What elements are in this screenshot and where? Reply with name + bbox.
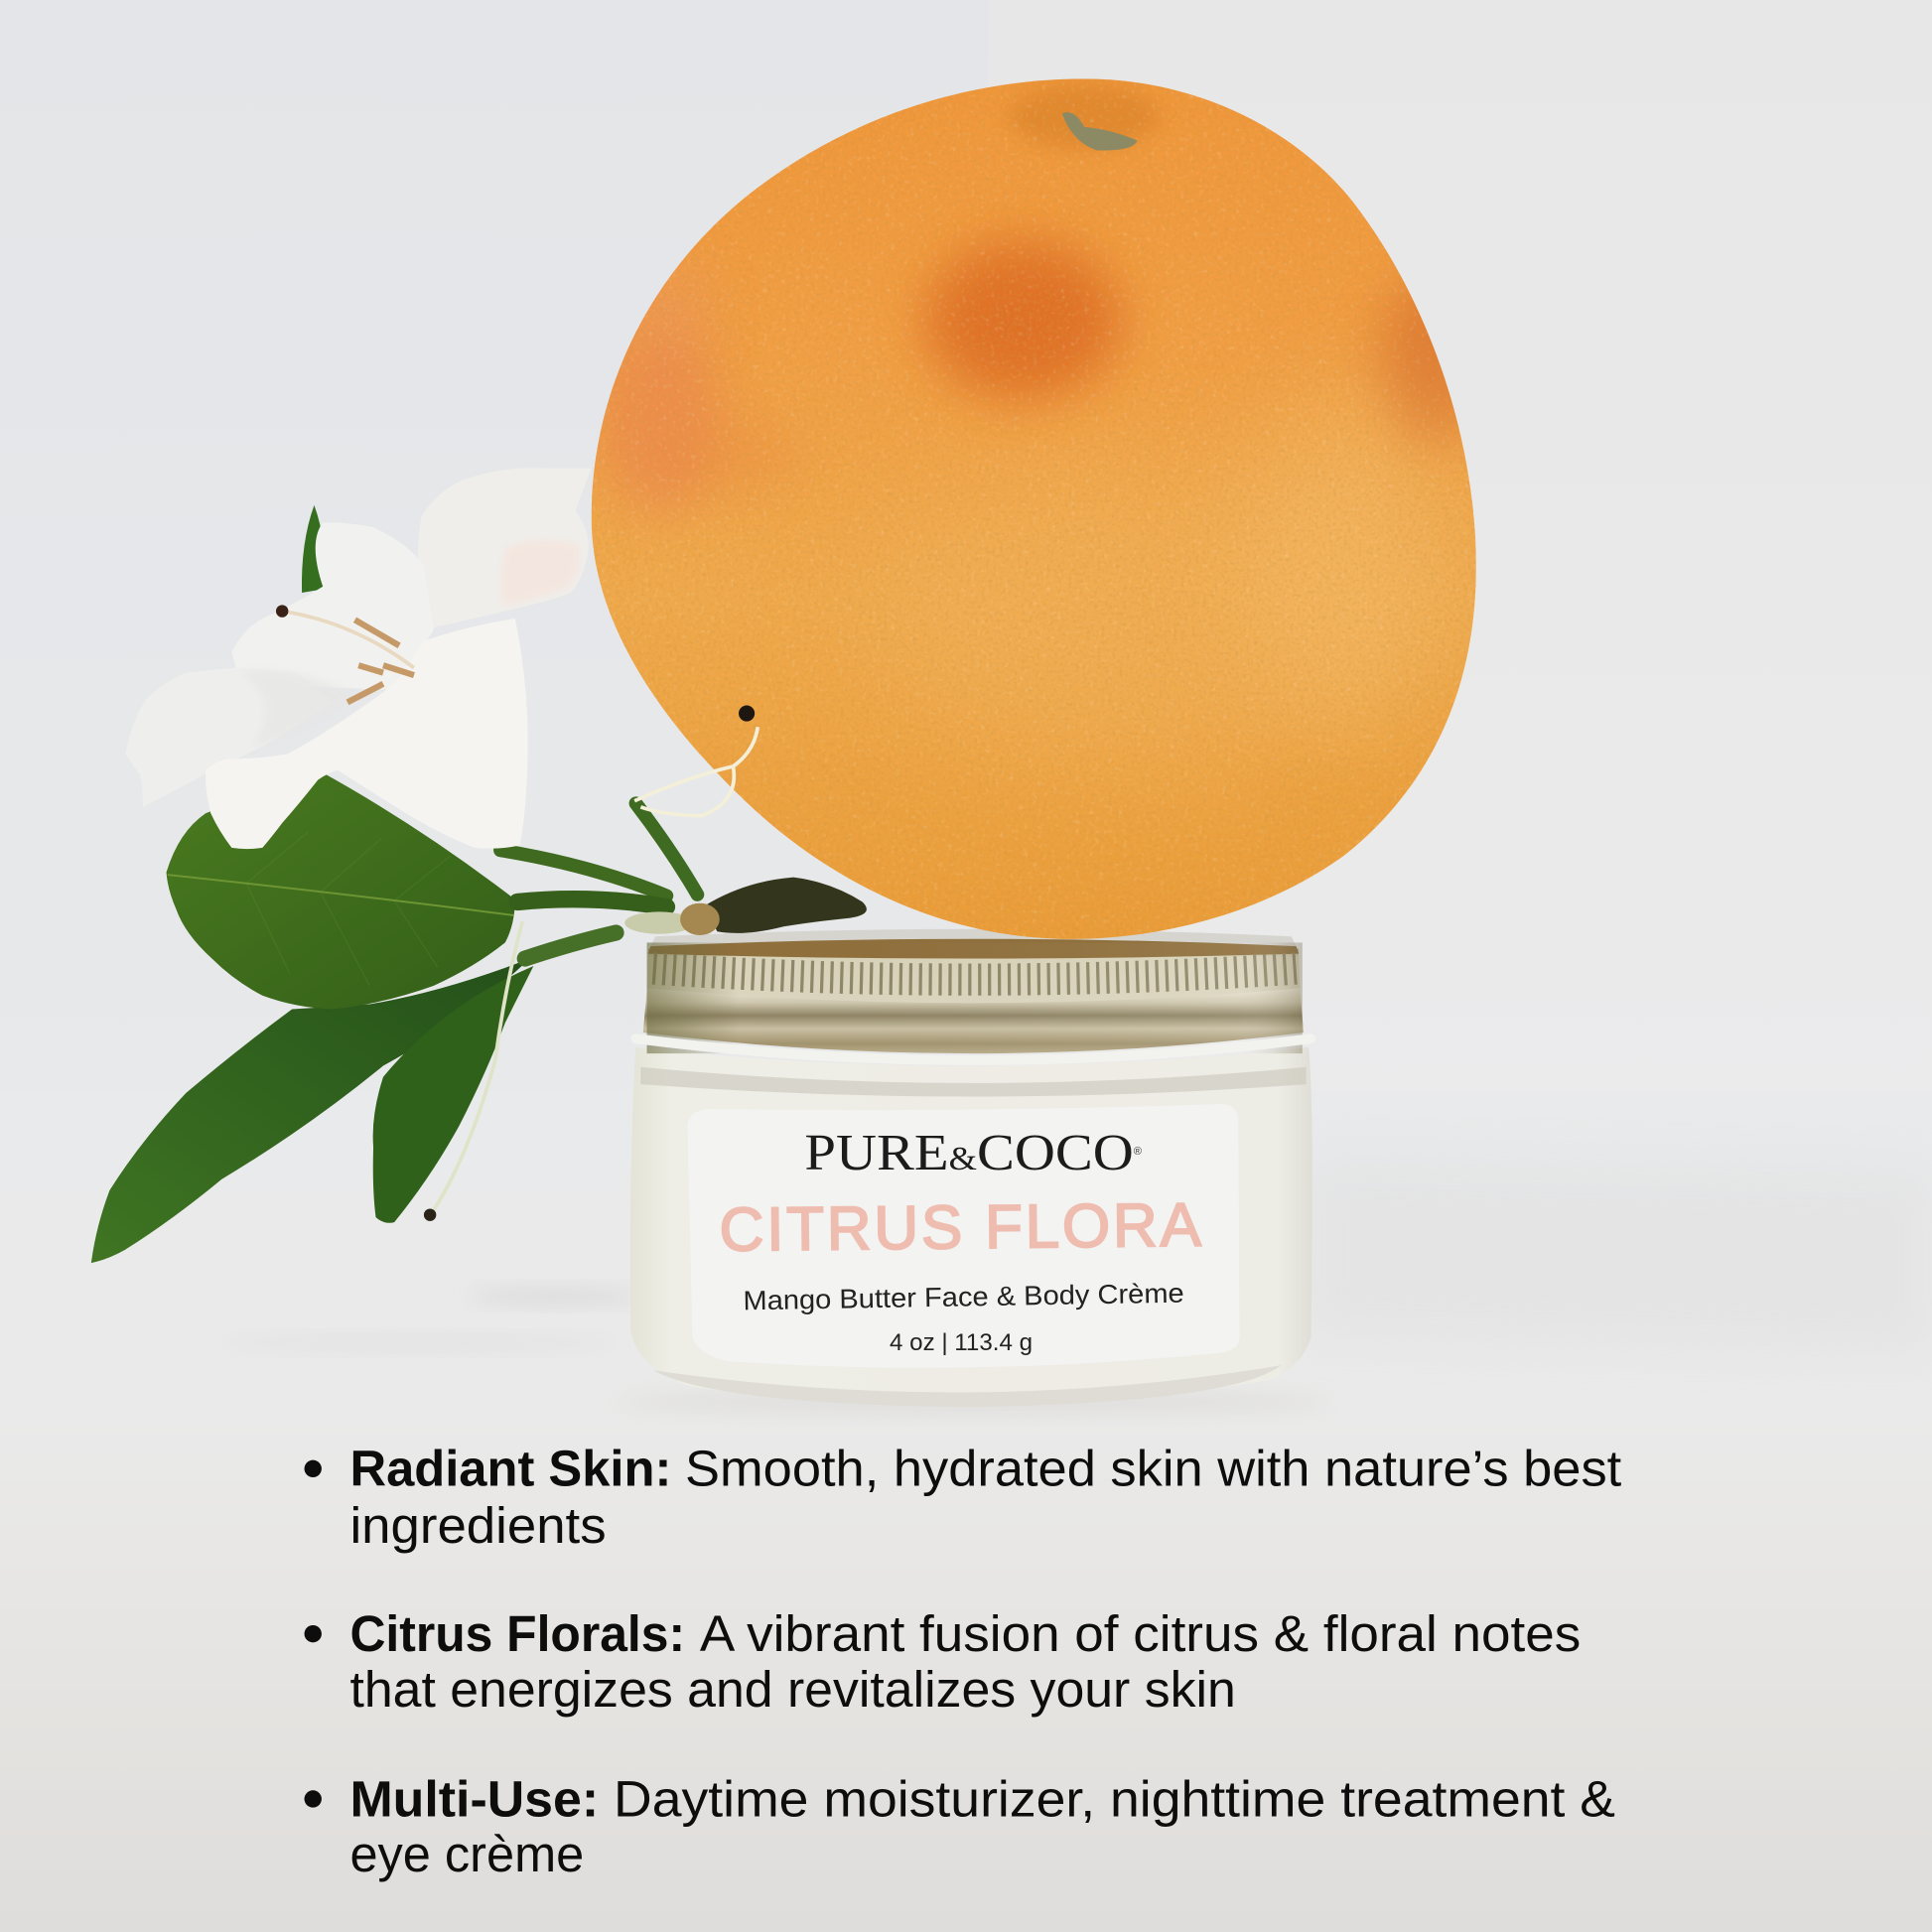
lower petal	[206, 619, 528, 849]
benefit: radiant skin	[305, 1441, 1621, 1554]
left petal	[126, 668, 333, 807]
brand name: PURE &COCO	[804, 1125, 1134, 1181]
benefit: multi-use	[305, 1770, 1615, 1882]
pink petal shade	[500, 539, 580, 607]
benefit: multi-use: Multi-Use:	[349, 1770, 599, 1827]
jar lid	[643, 929, 1304, 1053]
benefit: citrus florals: Citrus Florals:	[349, 1605, 685, 1662]
benefit: citrus florals: that energizes and revitalizes your skin	[349, 1661, 1236, 1718]
icon: white flower	[126, 468, 592, 849]
product title: CITRUS FLORA	[719, 1191, 1202, 1265]
benefit: radiant skin: Smooth, hydrated skin with nature’s best	[685, 1441, 1621, 1497]
benefit: multi-use: Daytime moisturizer, nighttime treatment &	[614, 1770, 1615, 1827]
weight: 4 oz | 113.4 g	[890, 1329, 1033, 1356]
upper center petal	[231, 522, 434, 690]
lower left leaf	[91, 959, 530, 1263]
benefit: radiant skin: ingredients	[349, 1497, 607, 1554]
dark stem	[705, 878, 867, 933]
icon: leaves and stems	[91, 505, 867, 1263]
petal shading	[240, 670, 357, 746]
upper right petal	[418, 468, 592, 629]
large leaf	[167, 770, 515, 1009]
benefit: citrus florals	[305, 1605, 1581, 1718]
bud	[624, 903, 720, 935]
benefits list	[305, 1441, 1621, 1882]
stems	[500, 803, 697, 959]
lower center leaf	[373, 966, 533, 1223]
benefit: radiant skin: Radiant Skin:	[349, 1441, 671, 1497]
small top leaf	[302, 505, 325, 593]
jar body	[630, 1047, 1312, 1406]
product description: Mango Butter Face & Body Crème	[743, 1278, 1184, 1315]
product label	[688, 1104, 1240, 1368]
grapefruit stem	[1062, 112, 1138, 151]
jar white rim	[635, 1038, 1311, 1060]
icon: grapefruit	[579, 68, 1491, 955]
thread on grapefruit	[634, 727, 758, 816]
benefit: multi-use: eye crème	[349, 1826, 584, 1882]
registered mark: ®	[1134, 1146, 1143, 1158]
large leaf veins	[168, 832, 515, 986]
icon: jar with lid	[630, 929, 1312, 1407]
benefit: citrus florals: A vibrant fusion of citrus & floral notes	[700, 1605, 1581, 1662]
hanging stamen	[431, 921, 522, 1213]
stamens and anthers	[276, 605, 414, 702]
